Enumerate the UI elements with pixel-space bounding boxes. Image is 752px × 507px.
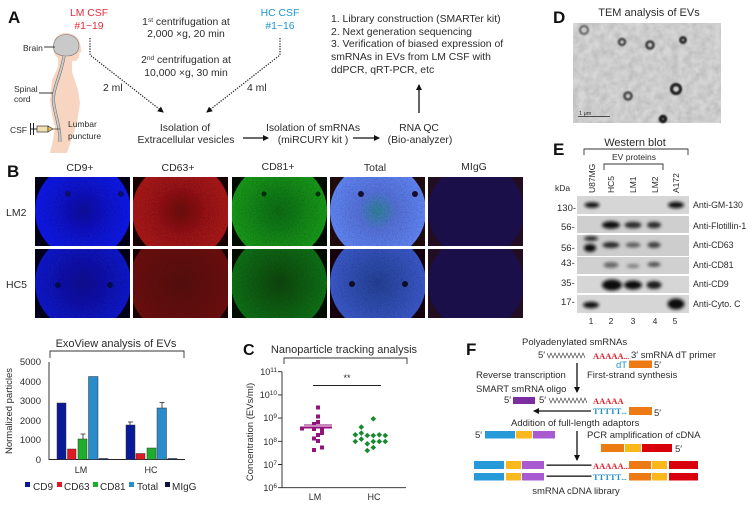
- lane numbers: 3: [631, 316, 636, 326]
- step: isolation of extracellular vesicles: Extracellular vesicles: [137, 135, 235, 146]
- antibody labels: Anti-Cyto. C: [693, 299, 741, 309]
- downstream steps list: ddPCR, qRT-PCR, etc: [331, 65, 434, 76]
- downstream steps list: [331, 14, 503, 76]
- legend: Total: [137, 482, 158, 493]
- anatomy labels: CSF: [10, 125, 27, 135]
- label A: A: [8, 8, 20, 27]
- axes and tick labels: 10: [263, 437, 273, 447]
- antibody labels: Anti-CD9: [693, 279, 729, 289]
- axes and tick labels: 10: [260, 367, 270, 377]
- downstream steps list: 2. Next generation sequencing: [331, 27, 472, 38]
- column headers: Total: [364, 162, 386, 174]
- axes and tick labels: Concentration (EVs/ml): [245, 383, 256, 481]
- column headers: MIgG: [461, 161, 487, 173]
- label F: F: [466, 340, 476, 359]
- axes and tick labels: LM: [309, 492, 321, 502]
- axes and tick labels: 11: [270, 367, 277, 374]
- lane labels: kDa: [555, 183, 570, 193]
- arrow: [418, 85, 420, 113]
- arrow: HC CSF 4 ml: [207, 38, 280, 112]
- row labels: HC5: [6, 279, 27, 291]
- legend: MIgG: [172, 482, 197, 493]
- column headers: [66, 161, 487, 174]
- axes and tick labels: 9: [273, 413, 277, 420]
- TEM micrograph: 1 μm: [579, 111, 592, 117]
- anatomy labels: puncture: [68, 131, 101, 141]
- molecular weight markers: 35-: [561, 278, 575, 289]
- step labels: Reverse transcription: [476, 370, 566, 381]
- arrow: HC CSF 4 ml: 4 ml: [247, 83, 267, 94]
- legend: [25, 482, 197, 493]
- y axis and labels: 0: [36, 455, 41, 466]
- step labels: First-strand synthesis: [587, 370, 678, 381]
- axes and tick labels: 10: [263, 483, 273, 493]
- centrifugation conditions: 2: [141, 55, 147, 66]
- bar chart: ExoView analysis: [4, 338, 197, 493]
- arrow: LM CSF 2 ml: [90, 38, 163, 112]
- axes and tick labels: [245, 367, 406, 502]
- cDNA library: AAAAA...: [593, 461, 629, 471]
- heading and brackets: EV proteins: [612, 152, 656, 162]
- molecular weight markers: 56-: [561, 243, 575, 254]
- SMART oligo diagram: [504, 395, 661, 419]
- step: isolation of smRNAs: [266, 123, 360, 146]
- label B: B: [7, 162, 19, 181]
- axes and tick labels: HC: [368, 492, 381, 502]
- LM data points: [300, 406, 333, 452]
- legend: CD81: [100, 482, 126, 493]
- step labels: [476, 337, 716, 497]
- lane numbers: 4: [653, 316, 658, 326]
- row labels: [6, 207, 27, 291]
- arrow: [353, 137, 379, 139]
- arrow: reverse transcription: [576, 363, 578, 392]
- arrow: PCR amplification: [576, 431, 578, 460]
- axes and tick labels: 7: [273, 460, 277, 467]
- lane labels: [555, 164, 681, 193]
- bars: [57, 376, 177, 460]
- centrifugation conditions: centrifugation at: [154, 55, 231, 66]
- y axis and labels: 1000: [20, 435, 41, 446]
- anatomy labels: Lumbar: [68, 119, 97, 129]
- HC CSF label: #1~16: [265, 21, 295, 32]
- y axis and labels: 3000: [20, 396, 41, 407]
- step: RNA QC: RNA QC: [399, 123, 439, 134]
- column headers: CD63+: [162, 162, 194, 174]
- molecular weight markers: 43-: [561, 258, 575, 269]
- cDNA library: [474, 461, 698, 482]
- cDNA library: TTTTT...: [593, 472, 627, 482]
- adaptor diagram: 5′: [675, 444, 682, 455]
- lane numbers: 5: [673, 316, 678, 326]
- axes and tick labels: 10: [263, 413, 273, 423]
- panel E: western blot: [553, 137, 746, 326]
- SMART oligo diagram: AAAAA: [593, 396, 625, 406]
- centrifugation conditions: [141, 17, 231, 79]
- axes and tick labels: 8: [273, 437, 277, 444]
- centrifugation conditions: 10,000 ×g, 30 min: [144, 68, 228, 79]
- step: isolation of extracellular vesicles: [137, 123, 235, 146]
- adaptor diagram: 5′: [475, 430, 482, 441]
- LM CSF label: #1~19: [74, 21, 104, 32]
- significance bar: **: [343, 373, 351, 383]
- antibody labels: [693, 200, 746, 309]
- HC CSF label: HC CSF: [261, 8, 299, 19]
- significance bar: [313, 373, 381, 386]
- panel D: TEM: [553, 7, 721, 123]
- step: RNA QC: [388, 123, 452, 146]
- blot strips: [577, 196, 689, 313]
- arrow: template switching: [534, 410, 591, 412]
- panel C: nanoparticle tracking dot plot: [243, 342, 418, 502]
- step: isolation of smRNAs: (miRCURY kit ): [278, 135, 348, 146]
- downstream steps list: 3. Verification of biased expression of: [331, 39, 503, 50]
- centrifugation conditions: st: [148, 17, 153, 24]
- group labels: LM: [75, 465, 87, 475]
- axes and tick labels: 6: [273, 483, 277, 490]
- lane labels: LM1: [628, 176, 638, 193]
- panel F: library preparation: [466, 337, 716, 497]
- downstream steps list: smRNAs in EVs from LM CSF with: [331, 52, 491, 63]
- lane numbers: 1: [589, 316, 594, 326]
- first strand diagram: 5′: [654, 360, 661, 371]
- heading: TEM analysis of EVs: [598, 7, 700, 19]
- y axis and labels: Normalized particles: [4, 368, 15, 454]
- centrifugation conditions: 1: [142, 17, 148, 28]
- chart title: Nanoparticle tracking analysis: [271, 344, 418, 356]
- adaptor diagram: [475, 430, 682, 455]
- antibody labels: Anti-CD81: [693, 260, 734, 270]
- LM CSF label: LM CSF: [70, 8, 108, 19]
- centrifugation conditions: nd: [147, 55, 154, 62]
- first strand diagram: 5′: [538, 350, 545, 361]
- lane labels: HC5: [606, 176, 616, 193]
- molecular weight markers: 130-: [557, 203, 576, 214]
- heading and brackets: [584, 137, 688, 170]
- column headers: CD81+: [262, 161, 294, 173]
- step: isolation of smRNAs: Isolation of smRNAs: [266, 123, 360, 134]
- arrow: [243, 137, 268, 139]
- step labels: PCR amplification of cDNA: [587, 430, 701, 441]
- anatomy labels: Brain: [23, 43, 43, 53]
- first strand diagram: AAAAA...: [593, 351, 629, 361]
- SMART oligo diagram: 5′: [654, 408, 661, 419]
- arrow: LM CSF 2 ml: 2 ml: [103, 83, 123, 94]
- lane numbers: 2: [609, 316, 614, 326]
- first strand diagram: [538, 350, 661, 371]
- HC data points: [352, 416, 388, 453]
- legend: CD63: [64, 482, 90, 493]
- legend: CD9: [33, 482, 53, 493]
- molecular weight markers: [557, 203, 576, 308]
- anatomy labels: [10, 43, 101, 141]
- panel B: fluorescence images: [6, 163, 523, 318]
- step: RNA QC: (Bio-analyzer): [388, 135, 452, 146]
- row labels: LM2: [6, 207, 27, 219]
- molecular weight markers: 17-: [561, 297, 575, 308]
- heading and brackets: Western blot: [604, 137, 666, 149]
- step labels: Addition of full-length adaptors: [511, 418, 640, 429]
- y axis and labels: 5000: [20, 357, 41, 368]
- lane numbers: [589, 316, 678, 326]
- chart title: ExoView analysis of EVs: [56, 338, 177, 350]
- antibody labels: Anti-CD63: [693, 240, 734, 250]
- image grid: [35, 177, 523, 318]
- HC CSF label: [261, 8, 299, 32]
- y axis and labels: 2000: [20, 416, 41, 427]
- axes and tick labels: 10: [263, 460, 273, 470]
- anatomy labels: cord: [14, 94, 31, 104]
- LM CSF label: [70, 8, 108, 32]
- step labels: smRNA cDNA library: [532, 486, 620, 497]
- SMART oligo diagram: 5′: [504, 395, 511, 406]
- icon: human body with spinal cord and syringe: [30, 33, 82, 153]
- TEM micrograph: [573, 23, 721, 123]
- lane labels: LM2: [650, 176, 660, 193]
- antibody labels: Anti-GM-130: [693, 200, 743, 210]
- group labels: [75, 465, 158, 475]
- axes and tick labels: 10: [270, 390, 277, 397]
- group labels: HC: [144, 465, 158, 475]
- anatomy labels: Spinal: [14, 84, 38, 94]
- step: isolation of extracellular vesicles: Isolation of: [160, 123, 210, 134]
- centrifugation conditions: 2,000 ×g, 20 min: [147, 29, 225, 40]
- label D: D: [553, 8, 565, 27]
- step labels: 3′ smRNA dT primer: [631, 350, 716, 361]
- lane labels: A172: [671, 173, 681, 193]
- y axis and labels: 4000: [20, 377, 41, 388]
- column headers: CD9+: [66, 162, 94, 174]
- SMART oligo diagram: 5′: [539, 395, 546, 406]
- antibody labels: Anti-Flotillin-1: [693, 221, 746, 231]
- panel A: workflow: [8, 8, 503, 153]
- step labels: SMART smRNA oligo: [476, 384, 566, 395]
- molecular weight markers: 56-: [561, 222, 575, 233]
- centrifugation conditions: centrifugation at: [153, 17, 230, 28]
- step labels: Polyadenylated smRNAs: [522, 337, 627, 348]
- label E: E: [553, 140, 564, 159]
- y axis and labels: [4, 357, 185, 466]
- label C: C: [243, 342, 255, 359]
- lane labels: U87MG: [587, 164, 597, 193]
- first strand diagram: dT: [616, 360, 627, 371]
- axes and tick labels: 10: [260, 390, 270, 400]
- SMART oligo diagram: TTTTT...: [593, 406, 627, 416]
- downstream steps list: 1. Library construction (SMARTer kit): [331, 14, 501, 25]
